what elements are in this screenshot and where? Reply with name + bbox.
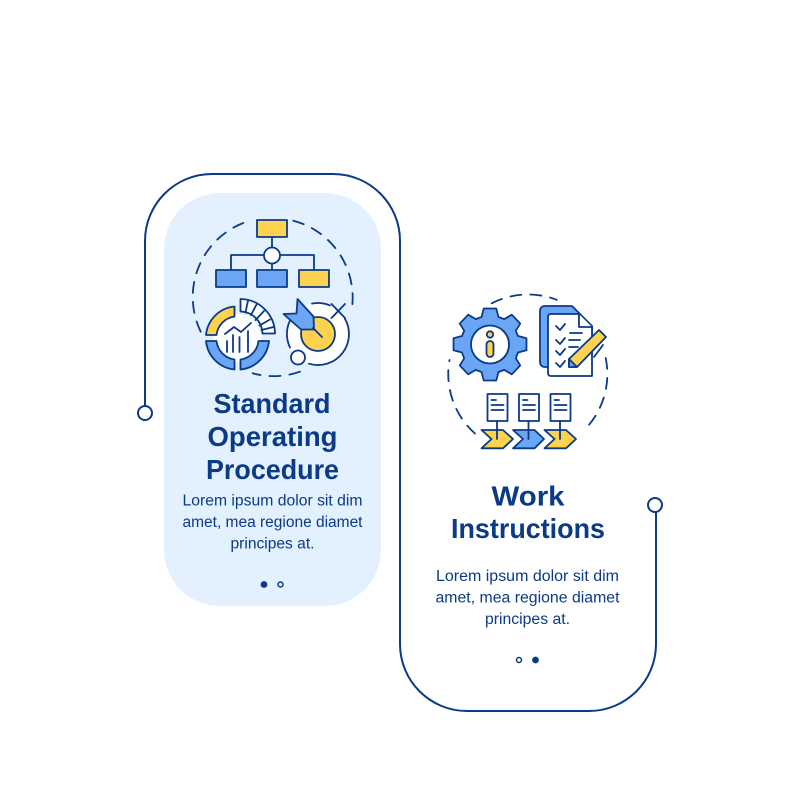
body text: work instructions — [436, 568, 620, 628]
three process documents with chevrons — [482, 394, 576, 448]
right connector end circle — [648, 498, 662, 512]
target with dart — [284, 299, 349, 365]
left connector end circle — [138, 406, 152, 420]
gear with info symbol — [454, 308, 526, 381]
heading: work instructions: Work — [492, 480, 565, 512]
pagination dots: left panel — [261, 581, 283, 588]
body text: standard operating procedure: Lorem ipsum dolor sit dim — [182, 492, 362, 510]
pagination dots: right panel — [516, 657, 539, 663]
heading: standard operating procedure — [206, 388, 339, 485]
checklist document with pencil — [540, 306, 606, 376]
body text: standard operating procedure: principes at. — [230, 536, 314, 552]
icon: standard operating procedure — [193, 220, 353, 376]
heading: standard operating procedure: Operating — [208, 421, 338, 452]
body text: work instructions: principes at. — [485, 611, 570, 628]
body text: work instructions: Lorem ipsum dolor sit dim — [436, 568, 619, 585]
dashed circle — [448, 294, 607, 434]
flowchart — [216, 220, 329, 287]
icon: work instructions — [448, 294, 607, 448]
heading: standard operating procedure: Standard — [214, 388, 330, 419]
heading: work instructions: Instructions — [451, 513, 605, 544]
dashed circle — [193, 221, 353, 376]
connector outline — [145, 174, 656, 711]
panel: standard operating procedure background — [164, 193, 381, 606]
body text: standard operating procedure: amet, mea regione diamet — [182, 514, 363, 531]
heading: work instructions — [451, 480, 605, 544]
heading: standard operating procedure: Procedure — [206, 454, 339, 485]
donut chart with line graph — [206, 299, 275, 370]
body text: standard operating procedure — [182, 492, 363, 552]
body text: work instructions: amet, mea regione diamet — [436, 590, 620, 606]
